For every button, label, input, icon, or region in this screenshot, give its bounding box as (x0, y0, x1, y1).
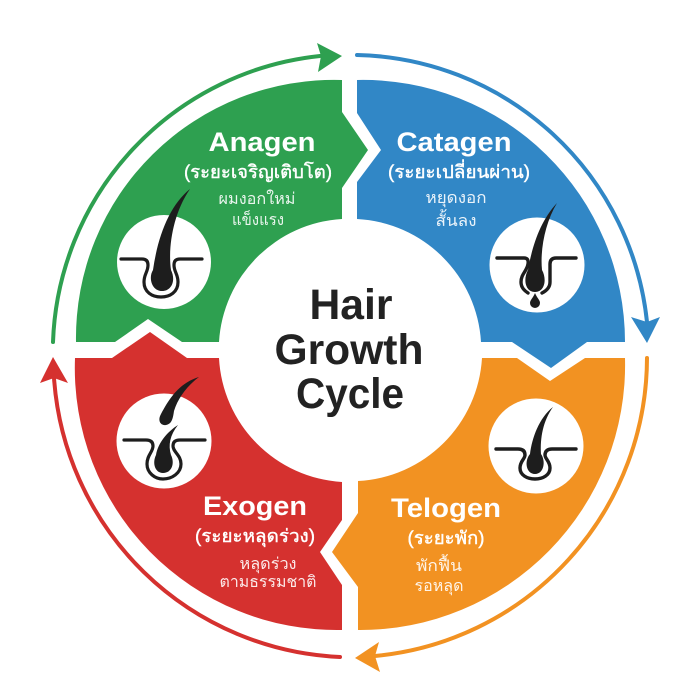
icon: falling hair (159, 377, 199, 425)
segment: catagen background (357, 80, 625, 368)
description: catagen: หยุดงอก (426, 190, 486, 208)
icon: growing hair follicle (117, 189, 211, 309)
icon: regressing hair follicle with drop (490, 203, 584, 312)
description: exogen: ตามธรรมชาติ (220, 574, 316, 591)
heading: telogen: Telogen (391, 493, 501, 523)
description: anagen: ผมงอกใหม่ (218, 189, 296, 208)
heading: anagen: Anagen (208, 127, 316, 157)
panel: telogen (332, 358, 625, 630)
title: hair growth cycle: Cycle (296, 370, 404, 418)
arrow: catagen to telogen (357, 55, 660, 343)
panel: catagen (357, 80, 625, 368)
description: anagen: แข็งแรง (232, 209, 284, 229)
description: telogen (414, 554, 464, 596)
icon: shedding hair follicle (116, 377, 212, 488)
panel: exogen (75, 332, 342, 630)
title: hair growth cycle (274, 281, 424, 418)
title: hair growth cycle: Growth (274, 326, 424, 374)
title: hair growth cycle: Hair (310, 281, 393, 329)
icon: resting hair follicle (488, 398, 584, 494)
heading: catagen: Catagen (396, 127, 512, 157)
description: telogen: รอหลุด (414, 578, 464, 596)
subheading: catagen thai: (ระยะเปลี่ยนผ่าน) (388, 159, 530, 182)
description: catagen (426, 190, 486, 230)
description: exogen (220, 556, 316, 591)
arrow: telogen to exogen (355, 358, 647, 672)
subheading: anagen thai: (ระยะเจริญเติบโต) (184, 161, 332, 182)
segment: telogen background (332, 358, 625, 630)
subheading: telogen thai: (ระยะพัก) (408, 528, 484, 548)
heading: exogen: Exogen (203, 491, 307, 521)
subheading: exogen thai: (ระยะหลุดร่วง) (195, 526, 315, 547)
icon: drop (530, 293, 540, 308)
arrow: anagen to catagen (53, 43, 342, 342)
segment: anagen background (76, 80, 368, 342)
arrow: exogen to anagen (40, 357, 340, 657)
description: anagen (218, 189, 296, 229)
description: exogen: หลุดร่วง (240, 556, 296, 574)
segment: exogen background (75, 332, 342, 630)
description: catagen: สั้นลง (436, 209, 476, 230)
description: telogen: พักฟื้น (416, 554, 462, 575)
panel: anagen (76, 80, 368, 342)
